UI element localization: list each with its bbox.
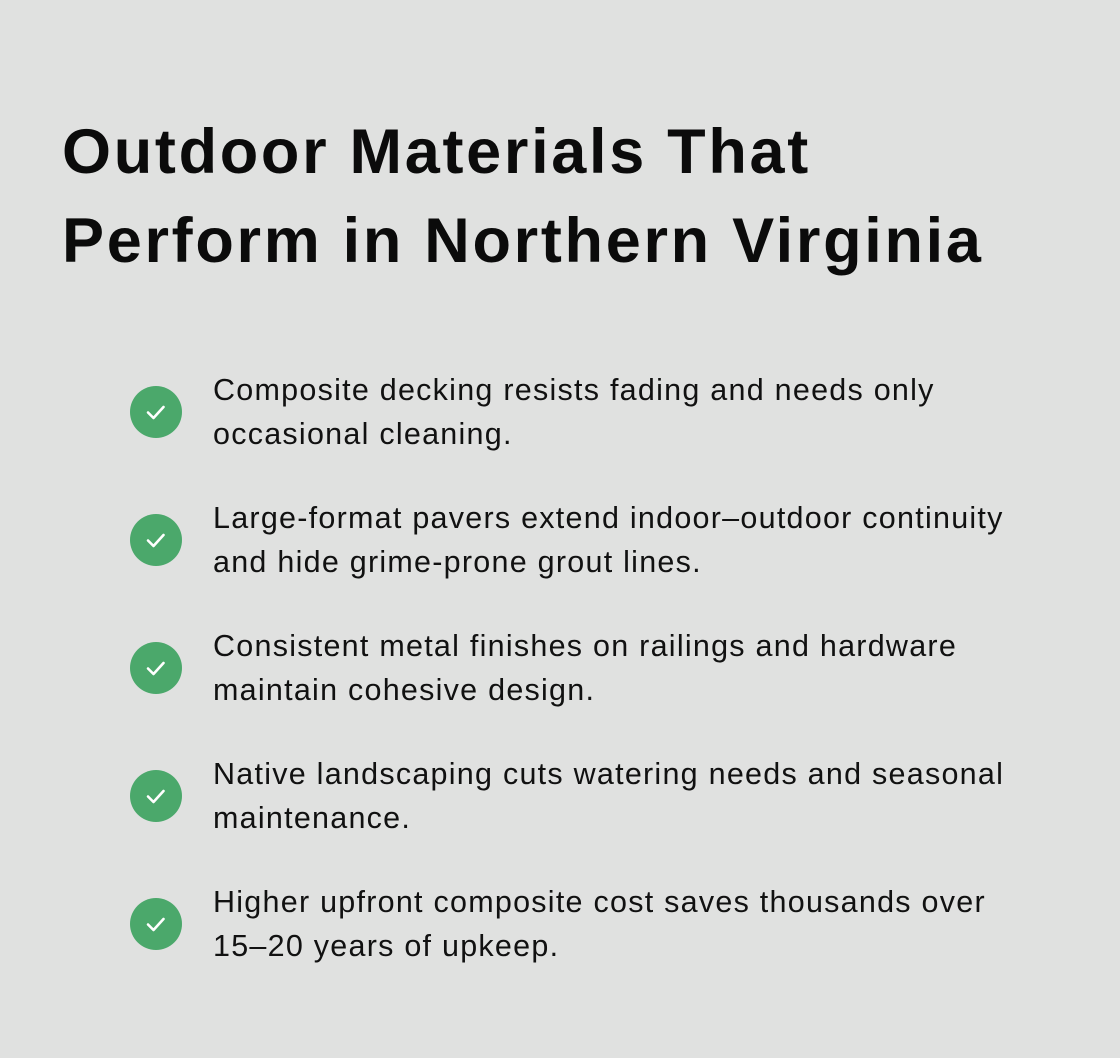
title bbox=[62, 117, 984, 276]
icon: check bbox=[130, 386, 182, 438]
icon: check bbox=[130, 898, 182, 950]
item 2 bbox=[130, 501, 1004, 579]
text bbox=[213, 757, 1004, 835]
text: Higher upfront composite cost saves thousands over bbox=[213, 885, 986, 919]
text: maintenance. bbox=[213, 801, 411, 835]
text: and hide grime-prone grout lines. bbox=[213, 545, 702, 579]
title: Outdoor Materials That bbox=[62, 117, 811, 187]
text: occasional cleaning. bbox=[213, 417, 513, 451]
text bbox=[213, 501, 1004, 579]
item 5 bbox=[130, 885, 986, 963]
text: maintain cohesive design. bbox=[213, 673, 595, 707]
item 3 bbox=[130, 629, 957, 707]
item 4 bbox=[130, 757, 1004, 835]
text: Consistent metal finishes on railings and hardware bbox=[213, 629, 957, 663]
icon: check bbox=[130, 770, 182, 822]
icon: check bbox=[130, 514, 182, 566]
text: 15–20 years of upkeep. bbox=[213, 929, 559, 963]
title: Perform in Northern Virginia bbox=[62, 206, 984, 276]
text bbox=[213, 885, 986, 963]
text: Native landscaping cuts watering needs and seasonal bbox=[213, 757, 1004, 791]
icon: check bbox=[130, 642, 182, 694]
text bbox=[213, 373, 935, 451]
text: Large-format pavers extend indoor–outdoor continuity bbox=[213, 501, 1004, 535]
text bbox=[213, 629, 957, 707]
item 1 bbox=[130, 373, 935, 451]
text: Composite decking resists fading and needs only bbox=[213, 373, 935, 407]
